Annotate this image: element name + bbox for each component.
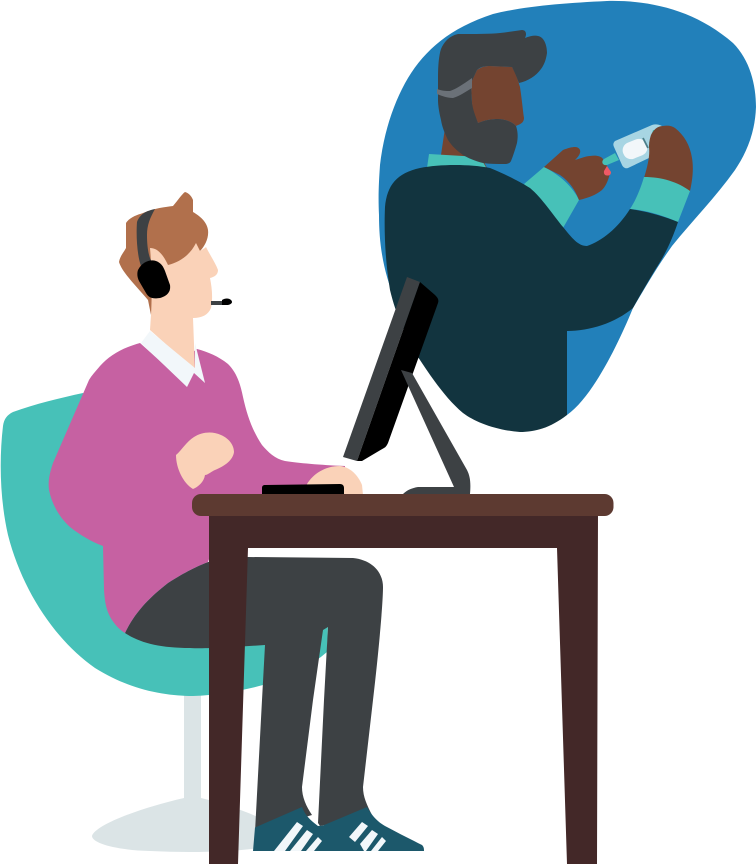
left shirt cuff	[524, 167, 579, 228]
chair	[1, 393, 328, 696]
monitor stand	[401, 370, 470, 494]
headband	[137, 209, 155, 266]
agent hair	[119, 192, 208, 315]
desk frame and legs	[209, 510, 598, 864]
microphone	[211, 301, 224, 305]
patient headset band	[437, 78, 472, 98]
shirt collar	[427, 154, 487, 169]
desk top	[192, 494, 614, 516]
sneakers	[253, 807, 424, 851]
agent raised hand	[176, 433, 234, 489]
desk	[192, 494, 614, 864]
chair post	[184, 690, 201, 802]
neck	[441, 128, 487, 168]
pants	[125, 557, 383, 832]
agent hand on keyboard	[307, 466, 363, 495]
blood drop	[604, 166, 611, 176]
glucose test strip	[602, 153, 619, 165]
monitor back	[357, 282, 438, 461]
headset	[137, 209, 232, 305]
patient face	[471, 66, 524, 126]
chair base	[92, 798, 260, 852]
support agent torso: sweater	[49, 343, 345, 633]
agent shirt collar	[141, 331, 205, 387]
right hand	[644, 126, 693, 191]
left hand	[544, 147, 610, 200]
keyboard	[262, 484, 344, 495]
agent face and neck	[150, 243, 218, 370]
glucose meter	[613, 124, 662, 168]
ear cup	[137, 260, 170, 298]
right shirt cuff	[630, 177, 690, 222]
monitor bezel	[343, 277, 420, 461]
shoe stripes	[274, 822, 386, 851]
monitor	[343, 277, 470, 494]
patient hair and beard	[438, 30, 547, 164]
thought bubble: patient testing blood sugar	[379, 1, 756, 432]
bubble background	[379, 1, 756, 415]
patient jacket	[385, 165, 678, 432]
